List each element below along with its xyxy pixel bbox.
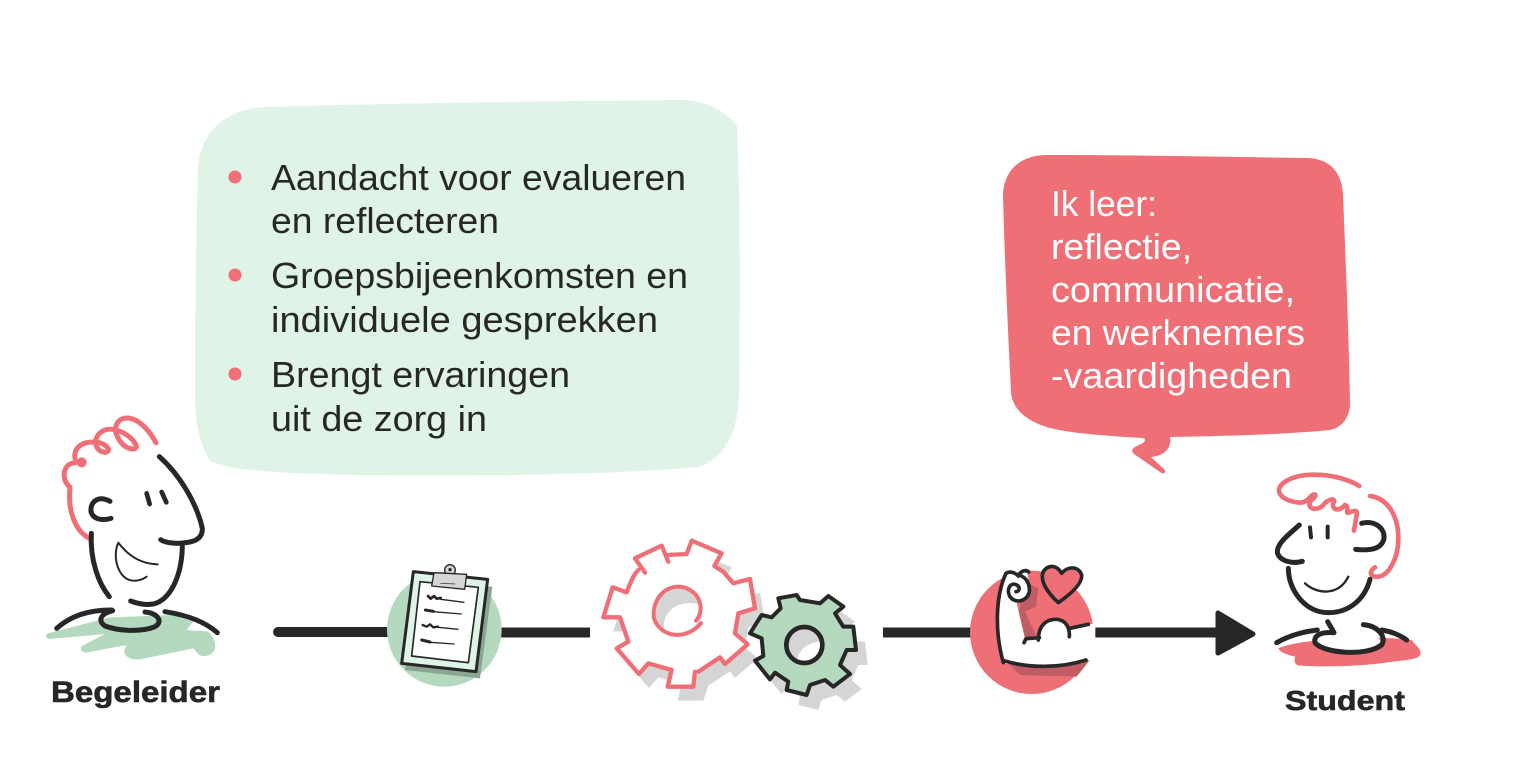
small gear hole (786, 627, 822, 663)
bullet 2 (228, 268, 242, 282)
large gear outline (603, 541, 755, 687)
list item 1: en reflecteren (271, 200, 499, 241)
icon: muscle and heart (970, 566, 1095, 694)
large gear fill (603, 541, 755, 687)
icon: clipboard (387, 565, 502, 687)
bullet 3 (228, 368, 242, 380)
label: Begeleider: Begeleider (51, 676, 220, 709)
arrow (1095, 613, 1253, 653)
icon: gears (603, 541, 868, 710)
bubble text: Ik leer: (1051, 183, 1157, 224)
green circle (387, 572, 502, 687)
muscle shadow (1008, 582, 1090, 677)
large gear hole (654, 587, 702, 636)
list item 2: Groepsbijeenkomsten en (271, 255, 688, 296)
timeline line segment 2 (495, 628, 590, 638)
list item 1 (271, 157, 686, 241)
bubble text: reflectie, (1051, 226, 1192, 267)
pink circle (970, 571, 1093, 694)
list item 2 (271, 255, 688, 340)
list item 3: uit de zorg in (271, 398, 487, 439)
figure: Student (1277, 475, 1421, 666)
small gear (750, 595, 856, 695)
panel: pink speech bubble (1003, 155, 1350, 473)
label: Student: Student (1285, 685, 1405, 716)
hair (1279, 475, 1398, 577)
green ground strokes (46, 615, 215, 659)
heart (1042, 566, 1082, 603)
arm (997, 572, 1095, 667)
bullet 1 (228, 170, 242, 184)
large gear shadow (613, 555, 765, 701)
written lines (422, 596, 464, 644)
bullet list text (228, 157, 688, 439)
bubble text (1051, 183, 1305, 396)
clipboard page (412, 582, 478, 663)
neck patch (1317, 623, 1382, 651)
list item 3 (271, 354, 570, 439)
figure: Begeleider (46, 418, 217, 659)
timeline line segment 3 (883, 628, 975, 638)
timeline line segment 1 (278, 627, 395, 637)
list item 3: Brengt ervaringen (271, 354, 570, 395)
bubble text: en werknemers (1051, 312, 1305, 353)
list item 1: Aandacht voor evalueren (271, 157, 686, 198)
clipboard clip (432, 565, 467, 589)
clipboard board (402, 572, 488, 672)
bubble text: communicatie, (1051, 269, 1295, 310)
arm outline (997, 571, 1088, 666)
small gear shadow (762, 610, 868, 710)
bubble text: -vaardigheden (1051, 355, 1292, 396)
hair (64, 418, 156, 538)
ground stroke (1278, 638, 1421, 666)
face (1277, 523, 1407, 652)
list item 2: individuele gesprekken (271, 299, 658, 340)
clipboard shadow (405, 587, 492, 678)
face (57, 457, 217, 633)
panel: green list bubble (195, 100, 740, 476)
